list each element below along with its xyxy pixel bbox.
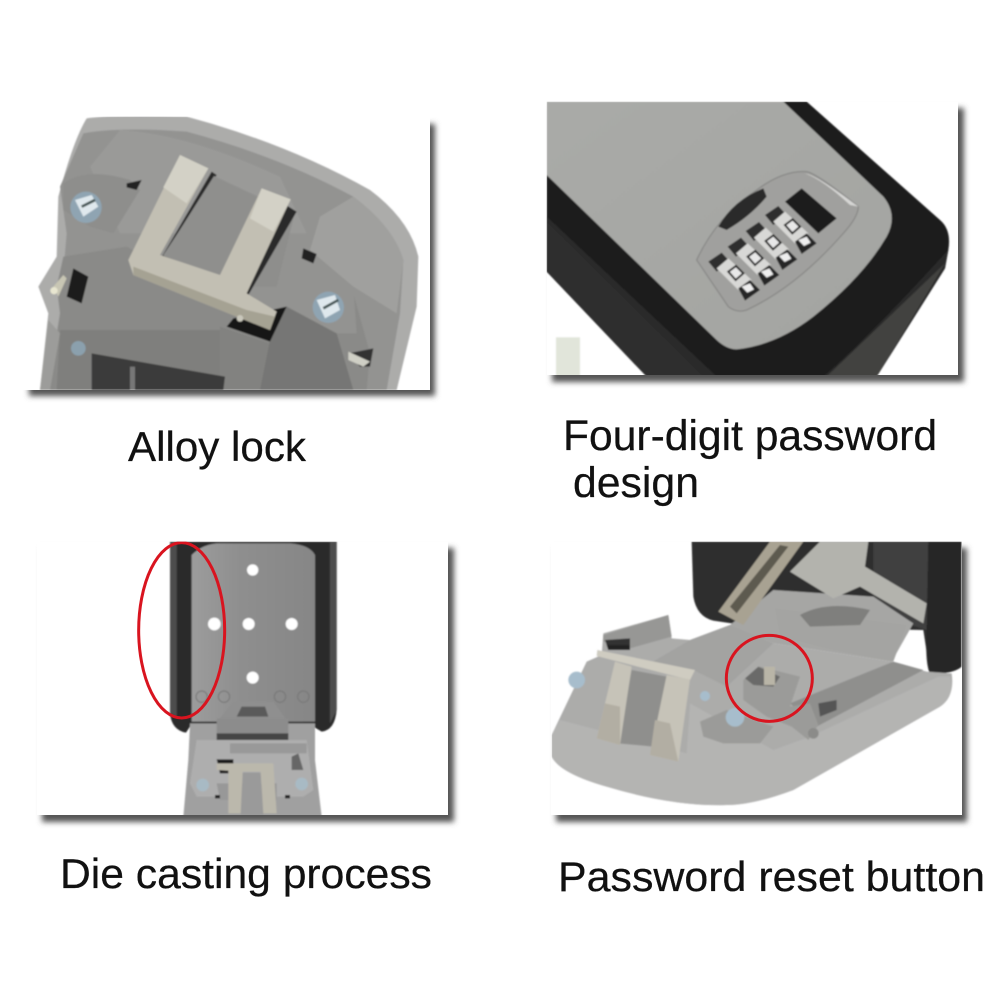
post bbox=[556, 337, 580, 377]
caption: four-digit password design: Four-digit password bbox=[563, 412, 937, 460]
reset thumb bbox=[785, 188, 837, 233]
digit wheels bbox=[708, 253, 760, 301]
screws bbox=[70, 192, 102, 223]
holes bbox=[247, 564, 258, 576]
metal clip bbox=[242, 772, 262, 784]
panel: four-digit password photo bbox=[547, 102, 964, 382]
black case bbox=[547, 102, 949, 377]
red circle marker bbox=[726, 635, 812, 721]
hinge back bbox=[730, 590, 913, 662]
lock body bbox=[38, 116, 418, 390]
lock window bbox=[92, 353, 225, 390]
panel: reset button photo bbox=[551, 542, 967, 822]
keys bbox=[718, 542, 803, 625]
grey block bbox=[618, 670, 667, 747]
metal clip bbox=[597, 650, 695, 680]
grey slot block bbox=[285, 220, 292, 234]
panel: alloy lock photo bbox=[20, 100, 435, 396]
open lid bbox=[170, 542, 337, 733]
metal clip bbox=[128, 177, 288, 331]
open lid bbox=[692, 542, 962, 674]
hinge bbox=[216, 720, 289, 734]
code window bbox=[697, 172, 858, 311]
base section bbox=[183, 723, 322, 817]
caption: four-digit password design: design bbox=[573, 459, 699, 507]
red circle marker bbox=[139, 543, 225, 718]
grey face bbox=[547, 102, 892, 349]
reset post housing bbox=[743, 667, 818, 740]
caption: four-digit password design bbox=[563, 412, 937, 507]
caption: alloy lock: Alloy lock bbox=[128, 423, 307, 470]
inner plate bbox=[192, 543, 315, 722]
caption: password reset button: Password reset button bbox=[558, 853, 985, 900]
caption: die casting process: Die casting process bbox=[60, 850, 432, 897]
panel: die casting photo bbox=[37, 542, 454, 822]
base bbox=[552, 617, 953, 754]
